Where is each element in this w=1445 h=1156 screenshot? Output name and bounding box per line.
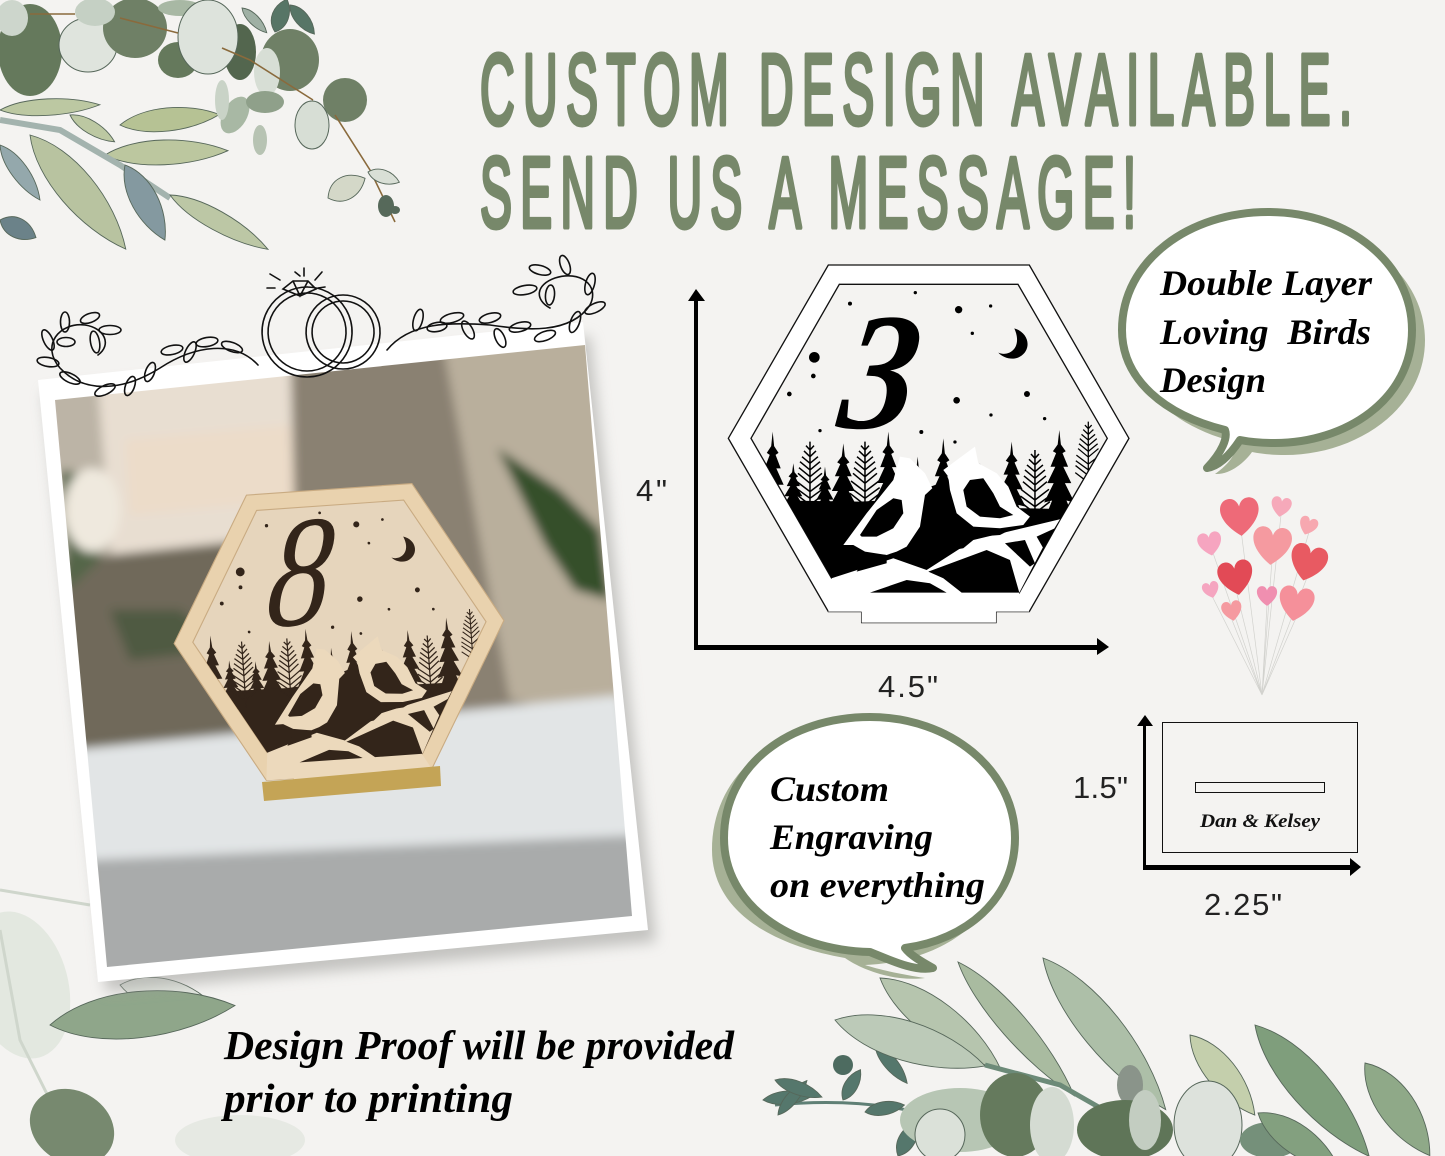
speech bubble: double layer: Design [1159,360,1266,400]
name card diagram: Dan & Kelsey [1199,811,1321,832]
dimension labels: 4" [636,473,667,508]
balloons illustration [1196,495,1330,695]
speech bubble: custom engraving: Custom [770,769,889,809]
speech bubble: double layer: Loving Birds [1159,312,1371,352]
speech bubble: custom engraving [712,717,1015,979]
dimension labels: 4.5" [878,669,938,704]
hexagon design diagram: 3 [829,280,932,464]
wooden stand [262,766,441,801]
design proof note: Design Proof will be provided [223,1022,734,1068]
name card diagram [1073,715,1361,922]
name card diagram: 1.5" [1073,770,1128,805]
foliage: top left [0,0,402,260]
design proof note [221,1022,734,1121]
wooden hexagon with bird engraving [164,471,514,795]
speech bubble: double layer: Double Layer [1159,263,1373,303]
dimension labels [636,473,938,704]
photo: wooden table number [30,320,656,992]
speech bubble: custom engraving: Engraving [769,817,933,857]
speech bubble: double layer [1122,212,1425,474]
speech bubble: custom engraving: on everything [770,865,985,905]
vine and rings line art [36,254,607,399]
name card diagram: 2.25" [1204,887,1282,922]
foliage: bottom right [762,945,1445,1156]
wooden hexagon with bird engraving: 8 [261,481,342,661]
title [480,33,1352,249]
title: CUSTOM DESIGN AVAILABLE. [480,33,1352,146]
foliage: bottom left [0,890,305,1156]
title: SEND US A MESSAGE! [480,136,1136,249]
dimension axes: hexagon [688,289,1109,655]
design proof note: prior to printing [221,1075,513,1121]
hexagon design diagram [728,265,1129,623]
